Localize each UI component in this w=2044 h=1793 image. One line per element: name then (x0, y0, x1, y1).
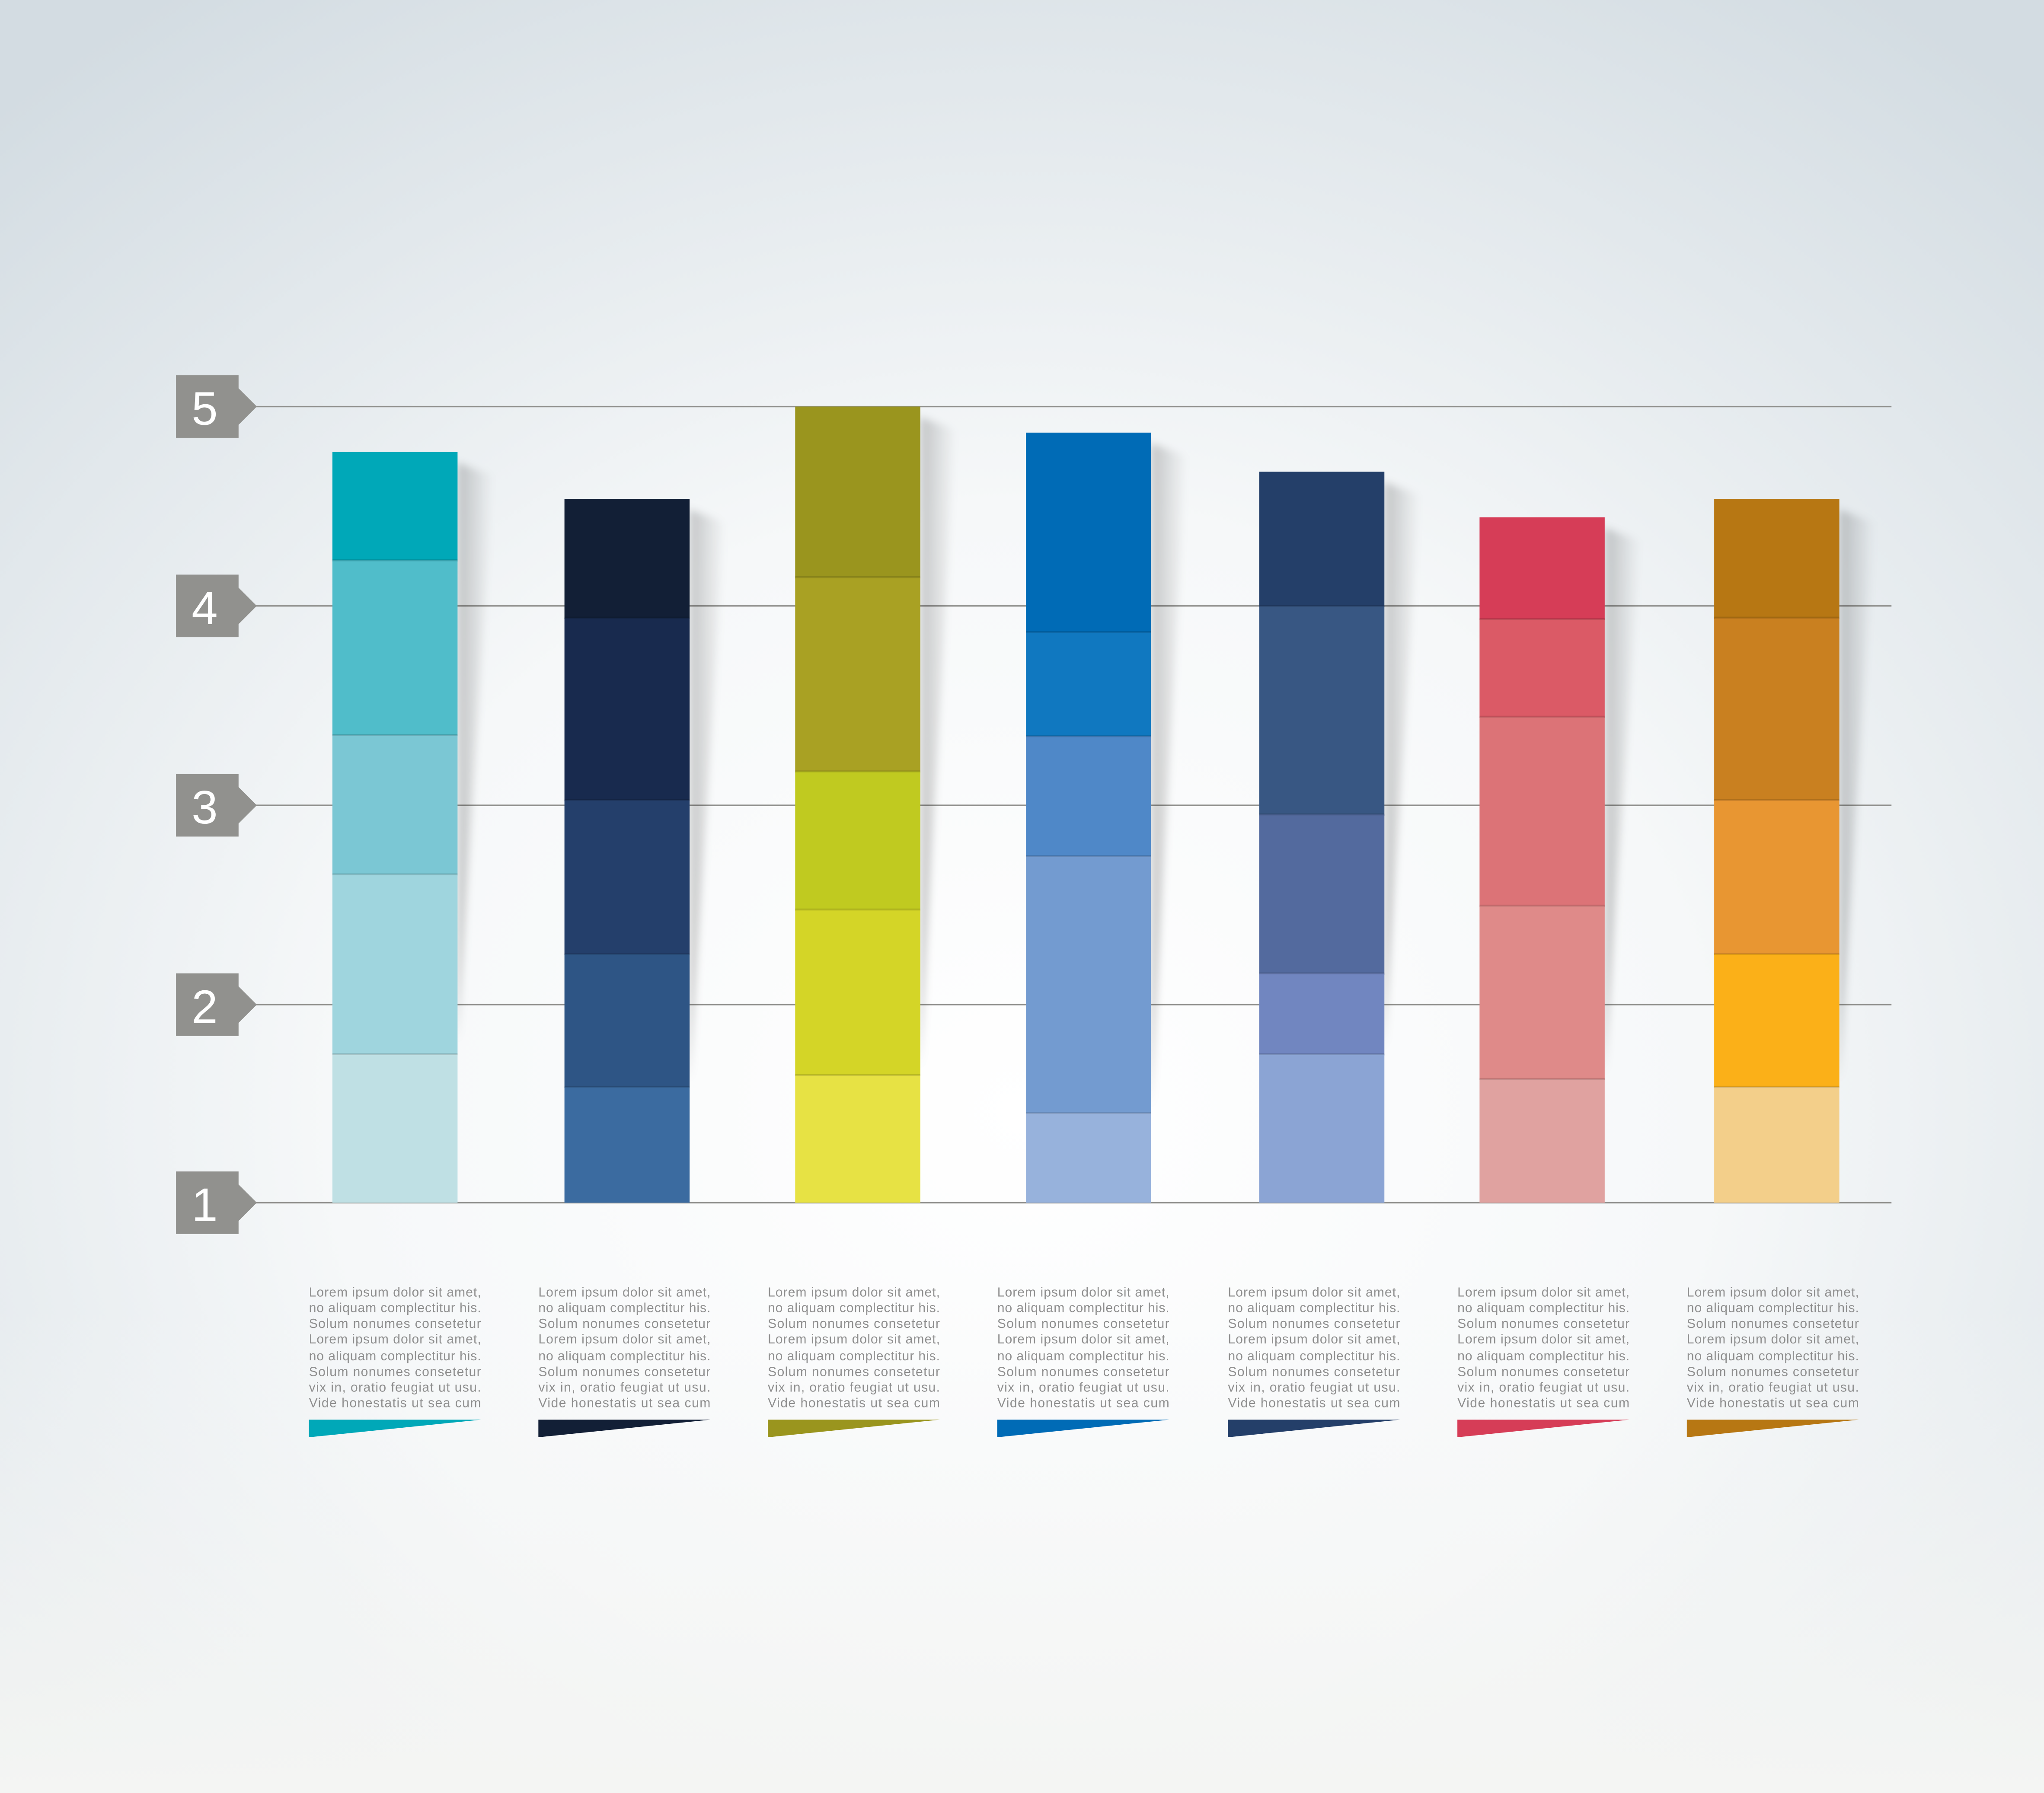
text block 5: Solum nonumes consetetur (1228, 1317, 1400, 1331)
text block 2 (538, 1285, 710, 1410)
text block 1: Solum nonumes consetetur (309, 1365, 481, 1379)
bar 2 (565, 499, 725, 1203)
text block 6: no aliquam complectitur his. (1457, 1349, 1629, 1363)
text block 4: no aliquam complectitur his. (997, 1349, 1169, 1363)
text block 2: Lorem ipsum dolor sit amet, (538, 1285, 710, 1299)
text block 2: Vide honestatis ut sea cum (538, 1396, 710, 1410)
text block 3: no aliquam complectitur his. (768, 1301, 940, 1315)
label 3 (176, 774, 257, 836)
bar 4 (1026, 433, 1186, 1203)
label 5: 5 (192, 383, 218, 435)
text block 3: no aliquam complectitur his. (768, 1349, 940, 1363)
text block 1: no aliquam complectitur his. (309, 1349, 481, 1363)
text block 6 (1457, 1285, 1629, 1410)
text block 5 (1228, 1285, 1400, 1410)
text block 7: vix in, oratio feugiat ut usu. (1687, 1381, 1859, 1395)
text block 6: Solum nonumes consetetur (1457, 1365, 1629, 1379)
text block 6: Solum nonumes consetetur (1457, 1317, 1629, 1331)
text block 5: vix in, oratio feugiat ut usu. (1228, 1381, 1400, 1395)
text block 5: Lorem ipsum dolor sit amet, (1228, 1332, 1400, 1346)
text block 1: Lorem ipsum dolor sit amet, (309, 1285, 481, 1299)
text block 5: no aliquam complectitur his. (1228, 1349, 1400, 1363)
text block 2: Solum nonumes consetetur (538, 1317, 710, 1331)
text block 7: no aliquam complectitur his. (1687, 1301, 1859, 1315)
text block 4: vix in, oratio feugiat ut usu. (997, 1381, 1169, 1395)
bar 3 (795, 407, 955, 1203)
bar 6 (1479, 517, 1640, 1203)
text block 7: Lorem ipsum dolor sit amet, (1687, 1332, 1859, 1346)
text block 1 (309, 1285, 481, 1410)
text block 4 (997, 1285, 1169, 1410)
text block 6: vix in, oratio feugiat ut usu. (1457, 1381, 1629, 1395)
text block 1: no aliquam complectitur his. (309, 1301, 481, 1315)
text block 1: Lorem ipsum dolor sit amet, (309, 1332, 481, 1346)
bar 5 (1259, 472, 1420, 1203)
text block 7: Solum nonumes consetetur (1687, 1365, 1859, 1379)
bar 1 (332, 452, 493, 1203)
text block 1: vix in, oratio feugiat ut usu. (309, 1381, 481, 1395)
text block 3 (768, 1285, 940, 1410)
text block 3: Vide honestatis ut sea cum (768, 1396, 940, 1410)
text block 7: Solum nonumes consetetur (1687, 1317, 1859, 1331)
text block 3: Solum nonumes consetetur (768, 1317, 940, 1331)
axis grid lines (248, 407, 1891, 1203)
label 3: 3 (192, 781, 218, 833)
text block 5: no aliquam complectitur his. (1228, 1301, 1400, 1315)
axis labels (176, 375, 257, 1234)
text block 6: Lorem ipsum dolor sit amet, (1457, 1332, 1629, 1346)
text block 2: no aliquam complectitur his. (538, 1301, 710, 1315)
label 2 (176, 973, 257, 1036)
label 4: 4 (192, 582, 218, 634)
text block 4: Solum nonumes consetetur (997, 1365, 1169, 1379)
color wedges (309, 1420, 1859, 1437)
text block 5: Vide honestatis ut sea cum (1228, 1396, 1400, 1410)
label 2: 2 (192, 980, 218, 1033)
text block 3: Lorem ipsum dolor sit amet, (768, 1332, 940, 1346)
label 1 (176, 1171, 257, 1234)
text block 6: Lorem ipsum dolor sit amet, (1457, 1285, 1629, 1299)
text block 3: vix in, oratio feugiat ut usu. (768, 1381, 940, 1395)
text block 2: vix in, oratio feugiat ut usu. (538, 1381, 710, 1395)
text block 7 (1687, 1285, 1859, 1410)
text block 4: Vide honestatis ut sea cum (997, 1396, 1169, 1410)
label 4 (176, 574, 257, 637)
text block 3: Lorem ipsum dolor sit amet, (768, 1285, 940, 1299)
text block 6: no aliquam complectitur his. (1457, 1301, 1629, 1315)
label 5 (176, 375, 257, 438)
text block 4: Solum nonumes consetetur (997, 1317, 1169, 1331)
text block 7: no aliquam complectitur his. (1687, 1349, 1859, 1363)
text block 2: Solum nonumes consetetur (538, 1365, 710, 1379)
text block 4: Lorem ipsum dolor sit amet, (997, 1332, 1169, 1346)
text block 4: no aliquam complectitur his. (997, 1301, 1169, 1315)
text block 1: Solum nonumes consetetur (309, 1317, 481, 1331)
bar 7 (1714, 499, 1875, 1203)
label 1: 1 (192, 1179, 218, 1231)
text block 2: Lorem ipsum dolor sit amet, (538, 1332, 710, 1346)
text block 7: Vide honestatis ut sea cum (1687, 1396, 1859, 1410)
text block 1: Vide honestatis ut sea cum (309, 1396, 481, 1410)
text block 4: Lorem ipsum dolor sit amet, (997, 1285, 1169, 1299)
text block 7: Lorem ipsum dolor sit amet, (1687, 1285, 1859, 1299)
text block 3: Solum nonumes consetetur (768, 1365, 940, 1379)
text block 5: Solum nonumes consetetur (1228, 1365, 1400, 1379)
text block 6: Vide honestatis ut sea cum (1457, 1396, 1629, 1410)
text block 2: no aliquam complectitur his. (538, 1349, 710, 1363)
text block 5: Lorem ipsum dolor sit amet, (1228, 1285, 1400, 1299)
